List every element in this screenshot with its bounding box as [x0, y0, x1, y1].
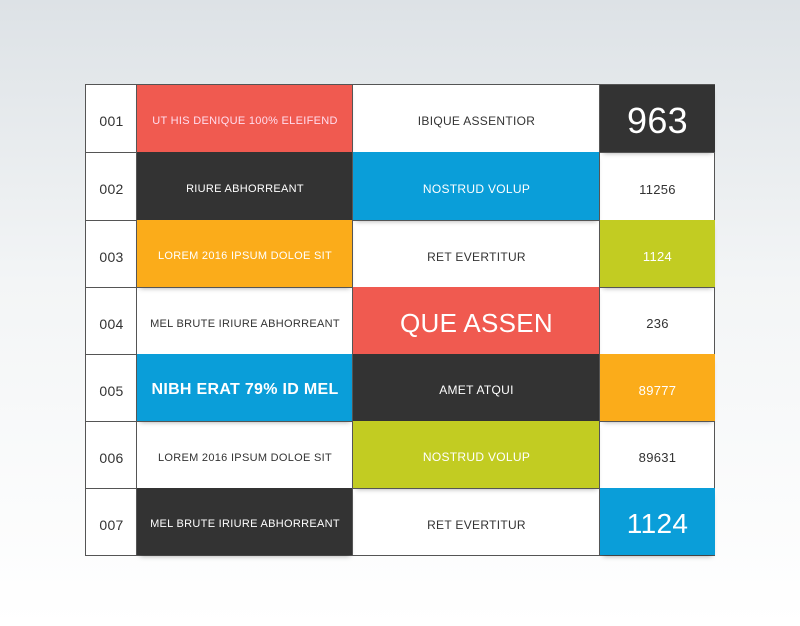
table: RET EVERTITUR: [427, 518, 526, 532]
row 001: 001: [99, 113, 124, 129]
table: LOREM 2016 IPSUM DOLOE SIT: [158, 452, 332, 464]
row 007: 007: [99, 516, 124, 532]
table: MEL BRUTE IRIURE ABHORREANT: [150, 518, 340, 530]
table: 11256: [639, 182, 676, 196]
row 006: 006: [99, 450, 124, 466]
table: QUE ASSEN: [400, 308, 553, 338]
row 007: [86, 488, 137, 555]
table: 1124: [643, 248, 672, 264]
row 002: 002: [99, 181, 124, 197]
table: 963: [627, 100, 688, 141]
row 006: [86, 421, 137, 488]
table: AMET ATQUI: [439, 383, 514, 397]
row 005: 005: [99, 382, 124, 398]
table: UT HIS DENIQUE 100% ELEIFEND: [152, 115, 338, 127]
table: 89777: [639, 382, 676, 398]
table: RET EVERTITUR: [427, 250, 526, 264]
table: 1124: [627, 508, 688, 539]
table: IBIQUE ASSENTIOR: [418, 114, 535, 128]
table: NIBH ERAT 79% ID MEL: [151, 381, 339, 398]
row 002: [86, 152, 137, 220]
table: NOSTRUD VOLUP: [423, 450, 530, 464]
table: RIURE ABHORREANT: [186, 182, 304, 194]
table: NOSTRUD VOLUP: [423, 182, 530, 196]
row 003: 003: [99, 248, 124, 264]
table: MEL BRUTE IRIURE ABHORREANT: [150, 318, 340, 330]
table: 236: [646, 316, 669, 331]
row 004: 004: [99, 316, 124, 332]
table: 89631: [639, 450, 676, 465]
row 004: [86, 287, 137, 354]
row 003: [86, 220, 137, 287]
row 005: [86, 354, 137, 421]
table: [85, 84, 715, 556]
table: LOREM 2016 IPSUM DOLOE SIT: [158, 250, 332, 262]
